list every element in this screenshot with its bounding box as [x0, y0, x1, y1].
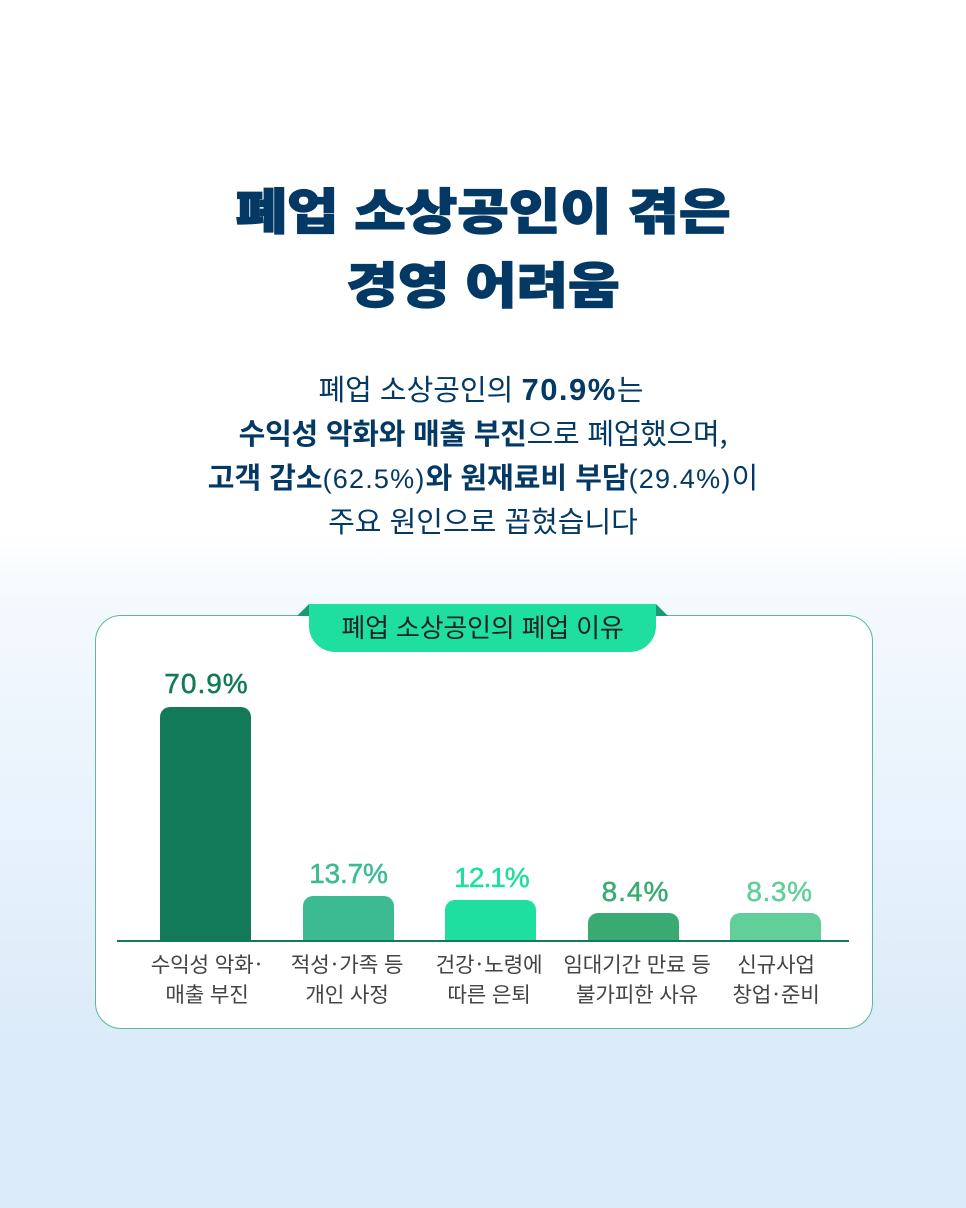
- label: 신규사업 창업·준비: 신규사업: [737, 948, 815, 979]
- title: [235, 173, 731, 318]
- label: 수익성 악화·매출 부진: 매출 부진: [165, 978, 249, 1009]
- value: 13.7%: 13.7%: [309, 858, 388, 889]
- label: 건강·노령에 따른 은퇴: 따른 은퇴: [447, 978, 531, 1009]
- tab fold left: [297, 604, 309, 616]
- value: 12.1%: 12.1%: [454, 862, 529, 893]
- label: 적성·가족 등 개인 사정: 개인 사정: [305, 978, 389, 1009]
- intro text: 수익성 악화와 매출 부진으로 폐업했으며,: [239, 411, 727, 453]
- panel: chart card: [94, 615, 872, 1029]
- bar chart: [117, 668, 849, 1009]
- intro text: 주요 원인으로 꼽혔습니다: [328, 499, 638, 541]
- label: 수익성 악화·매출 부진: [151, 948, 261, 1009]
- label: 임대기간 만료 등 불가피한 사유: [563, 948, 711, 1009]
- value: 8.4%: 8.4%: [602, 876, 669, 907]
- label: 적성·가족 등 개인 사정: 적성·가족 등: [291, 948, 403, 979]
- label: 신규사업 창업·준비: 창업·준비: [732, 978, 820, 1009]
- intro text: [208, 367, 758, 541]
- tab fold right: [656, 604, 668, 616]
- intro text: 고객 감소(62.5%)와 원재료비 부담(29.4%)이: [208, 455, 758, 497]
- title: 폐업 소상공인이 겪은: [235, 173, 731, 244]
- label: 임대기간 만료 등 불가피한 사유: 불가피한 사유: [576, 978, 698, 1009]
- bar: 13.7%: [303, 896, 394, 941]
- bar: 8.3%: [730, 913, 821, 941]
- axis line: [117, 940, 849, 942]
- intro text: 폐업 소상공인의 70.9%는: [318, 367, 644, 409]
- bar: 8.4%: [588, 913, 679, 941]
- chart heading tab: [309, 604, 656, 652]
- title: 경영 어려움: [346, 247, 620, 318]
- bar: 12.1%: [445, 900, 536, 941]
- label: 건강·노령에 따른 은퇴: [436, 948, 542, 1009]
- label: 적성·가족 등 개인 사정: [291, 948, 403, 1009]
- value: 8.3%: 8.3%: [746, 876, 813, 907]
- label: 신규사업 창업·준비: [732, 948, 820, 1009]
- label: 수익성 악화·매출 부진: 수익성 악화·: [151, 948, 261, 979]
- label: 건강·노령에 따른 은퇴: 건강·노령에: [436, 948, 542, 979]
- value: 70.9%: 70.9%: [164, 668, 249, 699]
- label: 임대기간 만료 등 불가피한 사유: 임대기간 만료 등: [563, 948, 711, 979]
- bar: 70.9%: [160, 707, 251, 941]
- chart heading tab: 폐업 소상공인의 폐업 이유: [341, 608, 624, 645]
